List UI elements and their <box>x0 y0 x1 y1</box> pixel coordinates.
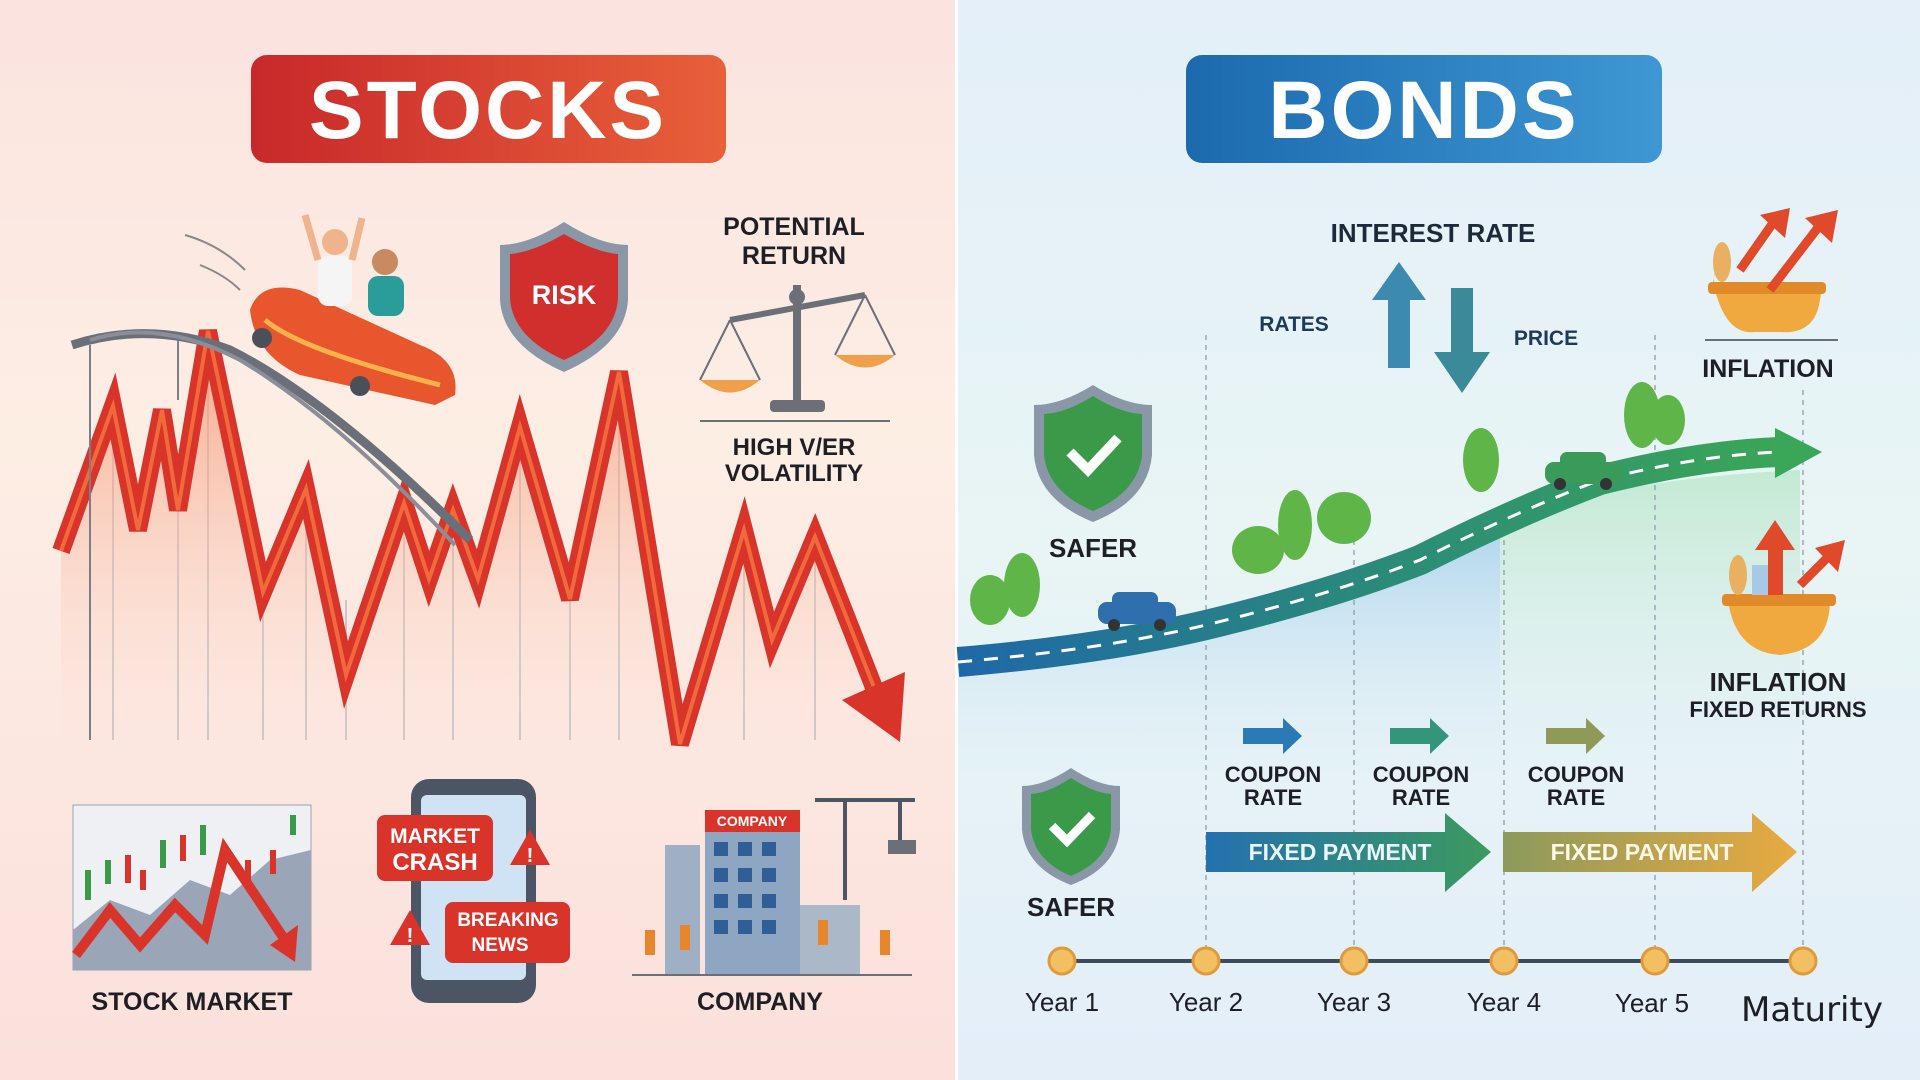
timeline <box>1025 948 1883 1030</box>
icon: phone with news alerts: CRASH <box>392 849 478 876</box>
icon: stock market chart <box>73 805 311 1016</box>
arrow: fixed payment 2 <box>1503 813 1797 892</box>
icon: company building: COMPANY <box>717 813 788 829</box>
text: interest rate: INTEREST RATE <box>1331 218 1535 248</box>
text: inflation fixed returns <box>1689 667 1867 722</box>
title: STOCKS <box>251 55 726 163</box>
text: inflation: INFLATION <box>1702 355 1834 383</box>
text: potential return <box>723 213 865 270</box>
timeline: Year 4 <box>1467 987 1541 1017</box>
icon: phone with news alerts: NEWS <box>472 935 528 956</box>
text: price: PRICE <box>1514 327 1578 350</box>
text: high volatility: VOLATILITY <box>725 460 863 487</box>
dashed year guides <box>1206 335 1803 963</box>
title: STOCKS: STOCKS <box>309 65 667 156</box>
coupon rate groups: RATE <box>1392 785 1450 810</box>
bonds: green glow area <box>1500 470 1800 800</box>
coupon rate groups: COUPON <box>1225 762 1321 787</box>
title: BONDS: BONDS <box>1268 65 1580 156</box>
icon: safer shield 2 <box>1022 768 1120 885</box>
arrow: fixed payment 1 <box>1206 813 1491 892</box>
text: safer 2: SAFER <box>1027 892 1115 922</box>
text: potential return: POTENTIAL <box>723 213 865 241</box>
arrow: fixed payment 2: FIXED PAYMENT <box>1551 839 1733 865</box>
timeline: Year 1 <box>1025 987 1099 1017</box>
bonds: blue glow area <box>958 525 1500 800</box>
timeline: Year 2 <box>1169 987 1243 1017</box>
timeline: Year 5 <box>1615 988 1689 1018</box>
icon: risk shield <box>500 222 628 372</box>
icon: roller coaster <box>72 215 470 740</box>
icon: company building: COMPANY <box>697 988 823 1016</box>
text: potential return: RETURN <box>742 242 846 270</box>
icon: balance scale <box>700 285 895 421</box>
icon: safer shield <box>1034 385 1152 522</box>
coupon rate groups: COUPON <box>1373 762 1469 787</box>
icon: phone with news alerts <box>377 779 570 1003</box>
title: BONDS <box>1186 55 1662 163</box>
panel: stocks background <box>0 0 955 1080</box>
icon: down arrowhead <box>842 672 905 742</box>
chart: volatile stock line <box>61 331 905 744</box>
icon: inflation basket lower <box>1722 520 1845 655</box>
icon: phone with news alerts: ! <box>527 845 533 867</box>
icon: stock market chart: STOCK MARKET <box>92 988 292 1016</box>
road <box>958 428 1822 662</box>
icon: inflation basket top <box>1705 208 1838 340</box>
icon: phone with news alerts: BREAKING <box>457 910 559 931</box>
timeline: Maturity <box>1741 990 1883 1030</box>
text: high volatility <box>725 434 863 487</box>
coupon rate groups: COUPON <box>1528 762 1624 787</box>
text: safer: SAFER <box>1049 533 1137 563</box>
coupon rate groups: RATE <box>1244 785 1302 810</box>
coupon rate groups <box>1225 718 1624 810</box>
text: inflation fixed returns: INFLATION <box>1710 667 1846 697</box>
icon: phone with news alerts: ! <box>407 925 413 947</box>
icon: company building <box>632 800 916 1016</box>
panel: bonds background <box>958 0 1920 1080</box>
icon: risk shield: RISK <box>532 280 597 310</box>
text: rates: RATES <box>1259 313 1329 336</box>
arrow: fixed payment 1: FIXED PAYMENT <box>1249 839 1431 865</box>
icon: up/down arrows <box>1372 262 1490 393</box>
text: inflation fixed returns: FIXED RETURNS <box>1689 697 1867 722</box>
icon: trees <box>970 382 1685 625</box>
coupon rate groups: RATE <box>1547 785 1605 810</box>
timeline: Year 3 <box>1317 987 1391 1017</box>
text: high volatility: HIGH V/ER <box>733 434 855 461</box>
icon: cars <box>1098 452 1623 631</box>
icon: phone with news alerts: MARKET <box>390 825 480 848</box>
